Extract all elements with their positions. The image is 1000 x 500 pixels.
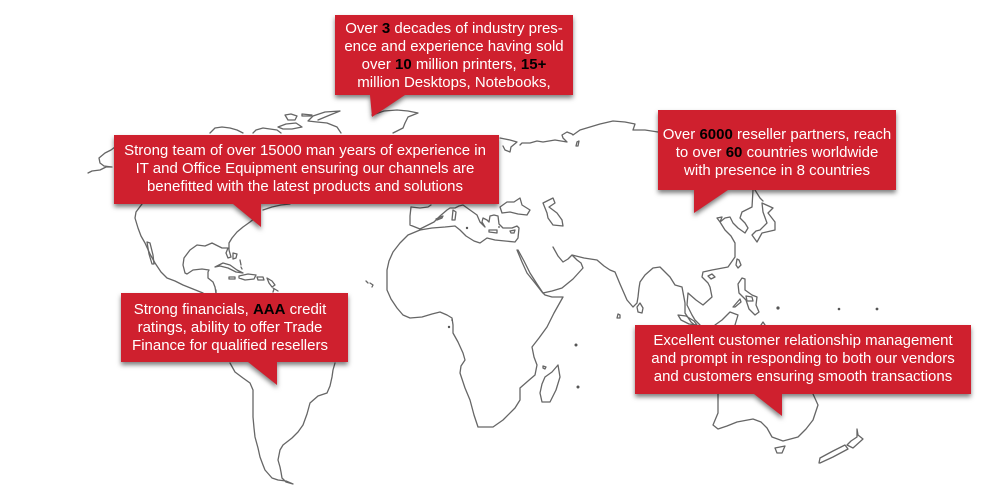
- callout: decades of industry presence: [335, 15, 573, 117]
- map: Arabia and South Asia: [518, 247, 697, 327]
- callout: customer relationship management: and prompt in responding to both our vendors: [651, 350, 955, 367]
- callout: customer relationship management: [635, 325, 971, 416]
- callout: decades of industry presence: million Desktops, Notebooks,: [357, 74, 551, 91]
- callout: customer relationship management: and customers ensuring smooth transactions: [654, 368, 952, 385]
- map: Australia and New Zealand: [713, 394, 818, 441]
- callout: team experience: [114, 135, 499, 227]
- callout: reseller partners: [658, 110, 896, 213]
- callout: strong financials: [121, 293, 348, 385]
- callout: strong financials: Strong financials, AAA credit: [134, 301, 327, 318]
- callout: strong financials: ratings, ability to offer Trade: [138, 319, 322, 336]
- callout: customer relationship management: Excellent customer relationship management: [653, 332, 953, 349]
- callout: reseller partners: Over 6000 reseller partners, reach: [663, 126, 891, 143]
- map: Greenland: [308, 110, 418, 133]
- callout: team experience: benefitted with the latest products and solutions: [147, 178, 463, 195]
- map: Africa: [387, 230, 563, 427]
- callout: strong financials: Finance for qualified resellers: [132, 337, 328, 354]
- map: Europe and northern Russia: [500, 121, 658, 152]
- callout: team experience: IT and Office Equipment ensuring our channels are: [136, 160, 474, 177]
- callout: reseller partners: to over 60 countries worldwide: [676, 144, 878, 161]
- callout: decades of industry presence: Over 3 decades of industry pres-: [345, 20, 563, 37]
- map: North and Central America: [88, 114, 312, 293]
- callout: reseller partners: with presence in 8 countries: [683, 162, 870, 179]
- callout: team experience: Strong team of over 15000 man years of experience in: [124, 142, 486, 159]
- map: East Asia: [687, 190, 753, 325]
- map: South America: [216, 289, 335, 484]
- callout: decades of industry presence: over 10 million printers, 15+: [362, 56, 547, 73]
- callout: decades of industry presence: ence and experience having sold: [344, 38, 564, 55]
- world map outline: [88, 110, 878, 484]
